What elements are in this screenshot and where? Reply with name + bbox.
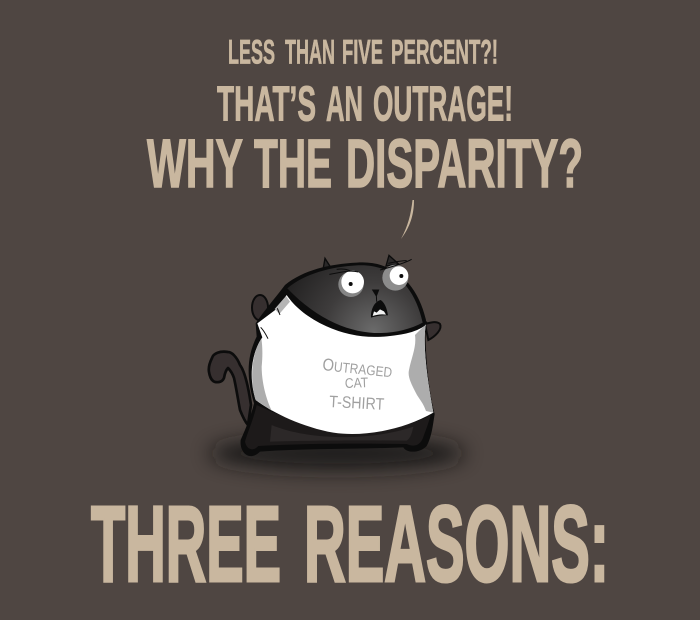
left eye — [338, 271, 364, 297]
trousers — [245, 405, 431, 449]
heading: why the disparity: THE — [254, 125, 332, 202]
heading: that's an outrage: AN — [326, 78, 363, 132]
right raised hand — [425, 322, 441, 340]
right eye — [382, 265, 408, 291]
nose — [373, 290, 379, 302]
ground shadow — [209, 436, 465, 471]
heading: that's an outrage: THAT’S — [217, 78, 316, 132]
heading: that's an outrage: OUTRAGE! — [373, 78, 513, 132]
heading: why the disparity: WHY — [147, 125, 243, 202]
shoulder shading — [275, 296, 290, 314]
heading: that's an outrage — [217, 78, 513, 132]
sleeve line — [261, 308, 280, 339]
shirt shading right — [409, 324, 433, 413]
left raised hand — [252, 295, 268, 320]
heading: less than five percent: LESS — [228, 34, 275, 72]
body silhouette — [241, 262, 435, 456]
shirt text — [322, 354, 393, 414]
closing heading: three reasons: THREE — [91, 483, 281, 604]
heading: why the disparity — [147, 125, 583, 202]
trousers highlight — [270, 425, 413, 442]
head — [287, 265, 423, 333]
collar line — [287, 292, 426, 336]
heading: less than five percent — [228, 34, 498, 72]
t-shirt — [252, 295, 433, 434]
mouth — [371, 300, 388, 318]
eyebrows — [329, 259, 412, 274]
teeth — [373, 309, 386, 316]
shirt text: OUTRAGED — [322, 354, 393, 381]
heading: less than five percent: PERCENT?! — [391, 34, 498, 72]
heading: less than five percent: FIVE — [342, 34, 383, 72]
cat illustration — [209, 255, 465, 471]
speech tail line — [401, 200, 414, 239]
shirt shading left — [252, 339, 272, 411]
shirt text: CAT — [345, 374, 369, 391]
tail — [209, 352, 251, 425]
shirt text: T-SHIRT — [329, 392, 385, 414]
heading: less than five percent: THAN — [285, 34, 335, 72]
ears — [323, 255, 399, 272]
